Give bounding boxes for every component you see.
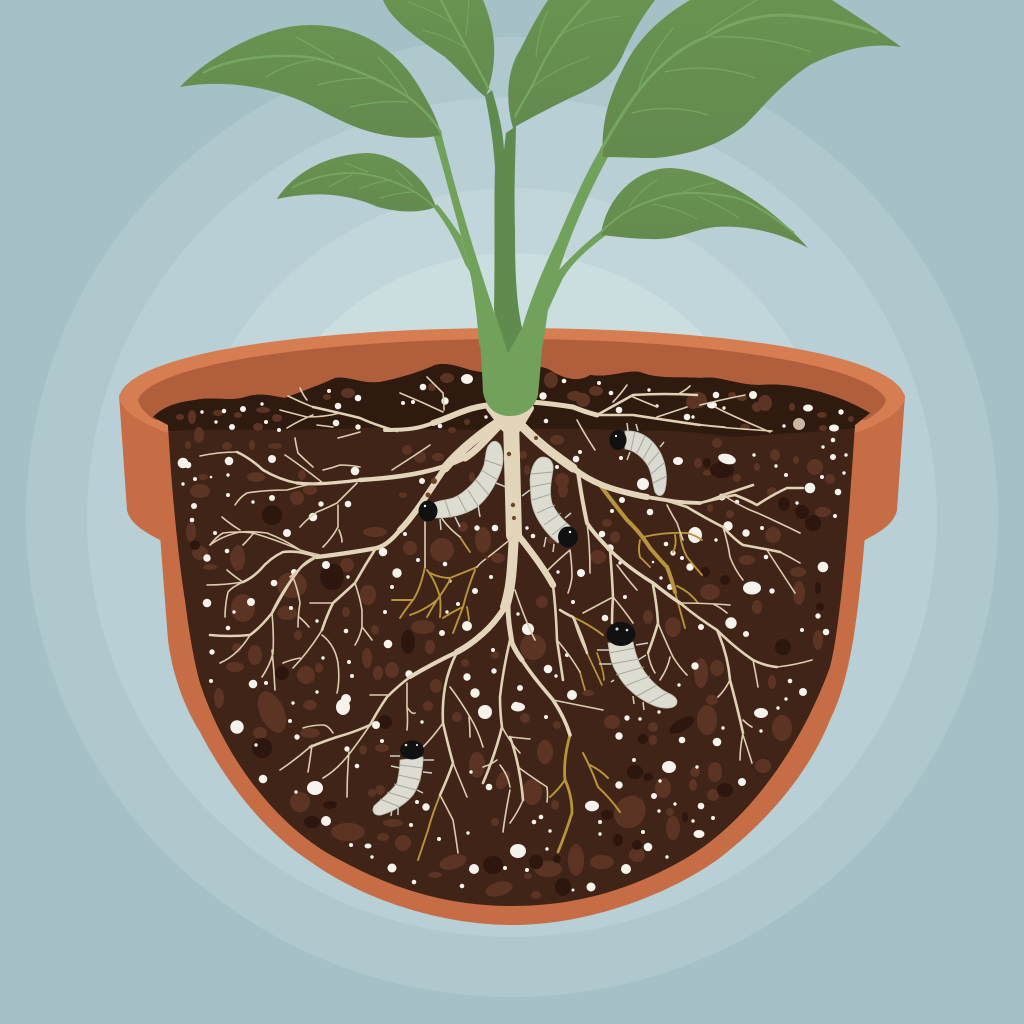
legs [390,756,434,816]
pot body [160,535,865,925]
tan perlite stone [793,418,805,430]
body [608,642,677,708]
terracotta pot [119,328,905,925]
stained root spots [426,436,538,560]
head [558,526,578,548]
perlite specks [178,374,848,892]
head [606,622,636,646]
body [373,757,423,815]
grub worm 4 [597,622,677,710]
grub worm 3 [610,423,667,496]
grub worm 2 [522,457,578,552]
root system [200,377,812,860]
right branch [548,231,605,312]
soil base [140,350,890,920]
pot rim outer wall [119,395,905,560]
fine rootlets [200,377,812,853]
left stem [434,132,500,345]
body [433,441,503,518]
legs [597,643,648,710]
leaf large right [601,0,901,158]
head [400,740,424,760]
soil [140,350,890,920]
leaf lower right [601,168,808,248]
thick main roots [297,402,700,735]
legs [440,483,506,530]
plant [180,0,901,416]
leaf top centre left [383,0,494,97]
grub worm 1 [418,441,506,530]
dark soil clods [190,458,824,896]
body [625,431,666,496]
leaf lower left [277,153,436,212]
body [530,457,570,543]
stem base [478,312,546,416]
right stem [515,148,608,345]
leaf top centre right [508,0,655,128]
left branch [434,204,470,272]
grub worm 5 [373,740,434,816]
pot inner wall [138,339,886,420]
darker back soil band [153,364,870,437]
legs [627,423,664,460]
brown soil blobs [176,372,854,899]
yellowed dying roots [392,485,702,860]
centre stem [485,90,522,353]
head [610,430,626,450]
leaf upper left [180,25,441,138]
head [418,500,438,522]
medium roots [210,394,803,800]
legs [522,490,571,552]
pot rim top [119,328,905,433]
